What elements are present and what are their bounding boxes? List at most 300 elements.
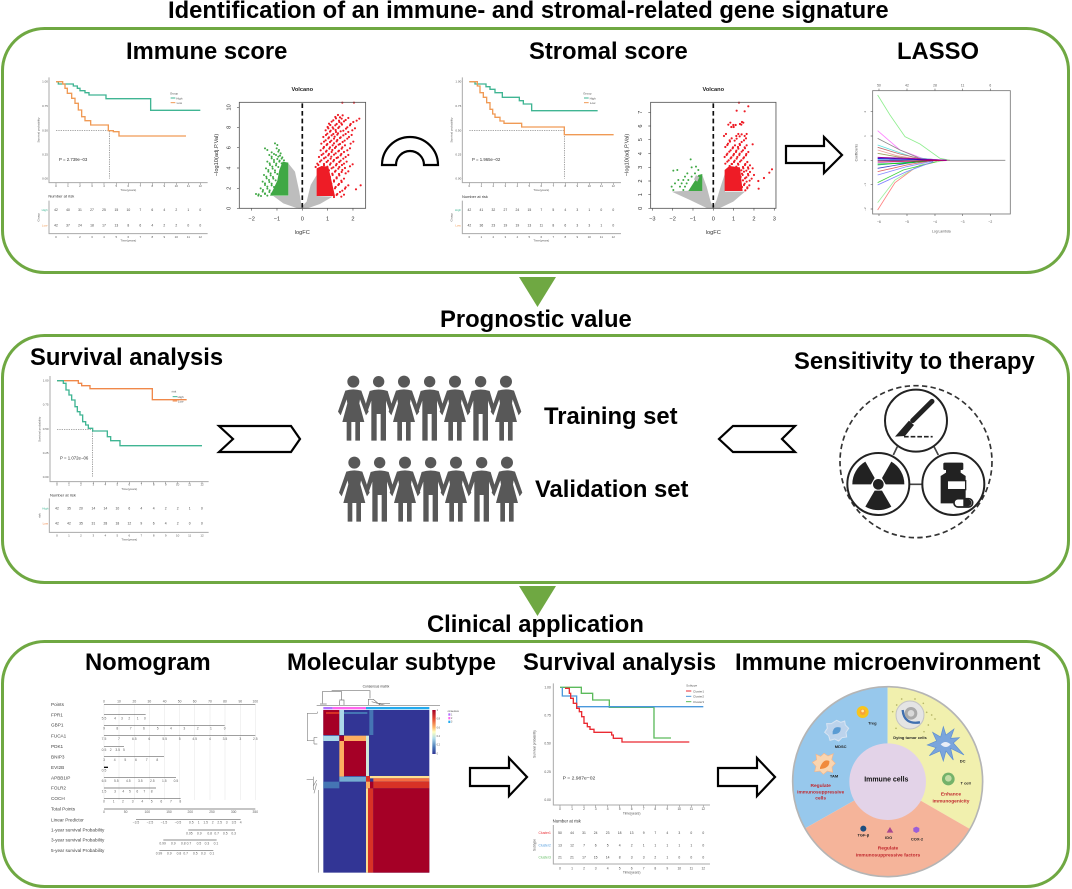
chart: survival curve training set: 31 (91, 522, 95, 526)
heading: survival analysis: Survival analysis (30, 344, 223, 371)
heading: survival analysis: Survival analysis (523, 649, 716, 676)
chart: nomogram: 0.3 (205, 841, 209, 845)
chart: nomogram: 3 (132, 800, 134, 804)
chart: nomogram: COCH (51, 796, 65, 801)
chart: immune score survival curve: Group (170, 91, 178, 95)
chart: subtype survival curve: 0.25 (544, 770, 551, 774)
label: training set: Training set (544, 403, 678, 430)
chart: subtype survival curve: 2 (631, 843, 633, 847)
chart: subtype survival curve: Cluster1 (693, 689, 704, 693)
chart: subtype survival curve: 0 (678, 856, 680, 860)
chart: immune score survival curve: 5 (115, 184, 117, 188)
chart: subtype survival curve: 4 (607, 866, 609, 870)
chart: immune score survival curve: 4 (103, 235, 105, 239)
chart: survival curve training set: Time(years) (121, 537, 137, 541)
chart: nomogram: 3.5 (223, 737, 227, 741)
chart: nomogram: 3.5 (115, 748, 120, 752)
chart: subtype survival curve: 9 (643, 831, 645, 835)
chart: immune score volcano plot: 0 (227, 207, 233, 210)
chart: stromal score survival curve: 8 (564, 235, 566, 239)
chart: subtype survival curve: 23 (606, 831, 610, 835)
chart: stromal score survival curve: 4 (564, 208, 566, 212)
chart: nomogram: 2.5 (217, 821, 222, 825)
chart: subtype survival curve: 4 (607, 807, 609, 811)
chart: survival curve training set: 35 (79, 522, 83, 526)
chart: stromal score survival curve: 6 (540, 235, 542, 239)
chart: immune score survival curve: 7 (139, 208, 141, 212)
chart: survival curve training set: 3 (92, 483, 94, 487)
label: regulate immunosuppressive cells: Regulate (810, 783, 831, 789)
chart: stromal score survival curve: 41 (479, 208, 483, 212)
chart: subtype survival curve: 6 (631, 866, 633, 870)
chart: nomogram: 4.5 (126, 779, 131, 783)
chart: survival curve training set: 9 (165, 483, 167, 487)
chart: immune score survival curve: Survival probability (36, 117, 40, 143)
icon: T cell (942, 773, 971, 786)
chart: survival curve training set: 3 (92, 533, 94, 537)
chart: nomogram: 4 (114, 758, 116, 762)
chart: nomogram: 0.1 (214, 841, 218, 845)
chart: stromal score survival curve: Number at risk (462, 194, 488, 199)
chart: immune score volcano plot: −1 (274, 216, 280, 222)
chart: nomogram: 2.5 (253, 737, 258, 741)
chart: nomogram: 0.5 (193, 852, 198, 856)
chart: subtype survival curve: 6 (595, 843, 597, 847)
chart: subtype survival curve (533, 683, 710, 875)
chart: nomogram: 0.5 (102, 768, 106, 772)
chart: subtype survival curve: 31 (582, 831, 586, 835)
chart: nomogram: 200 (188, 810, 193, 814)
chart: subtype survival curve: 1 (666, 856, 668, 860)
chart: nomogram: 5 (179, 737, 181, 741)
chart: immune score volcano plot: 2 (351, 216, 355, 222)
chart: nomogram: 7.5 (102, 737, 106, 741)
chart: subtype survival curve: 9 (666, 866, 668, 870)
chart: nomogram: 70 (208, 699, 212, 703)
chart: stromal score survival curve: 7 (552, 184, 554, 188)
chart: immune score survival curve: 1 (67, 235, 69, 239)
chart: nomogram: 1-year survival Probability (51, 827, 105, 832)
chart: LASSO coefficient paths: 50 (877, 83, 881, 87)
chart: LASSO coefficient paths: 1 (863, 135, 867, 137)
chart: immune score survival curve: 11 (187, 184, 190, 188)
chart: subtype survival curve: 2 (583, 866, 585, 870)
chart: survival curve training set: 10 (176, 483, 180, 487)
chart: nomogram: 6 (143, 727, 145, 731)
chart: nomogram: 4.5 (192, 737, 197, 741)
chart: subtype survival curve: 0 (690, 856, 692, 860)
chart: stromal score volcano plot (625, 87, 776, 236)
arrow: to survival analysis (470, 758, 527, 796)
chart: stromal score survival curve: Survival probability (450, 117, 454, 143)
chart: subtype survival curve: 5 (607, 843, 609, 847)
chart: nomogram: 1.5 (203, 821, 208, 825)
chart: nomogram: 0.9 (197, 831, 202, 835)
chart: nomogram: 1 (113, 800, 115, 804)
chart: stromal score survival curve: 0 (468, 184, 470, 188)
chart: subtype survival curve: Subtype (686, 683, 697, 687)
chart: immune score survival curve: 0.75 (42, 104, 48, 108)
chart: immune score survival curve: 18 (90, 223, 94, 227)
chart: immune score survival curve: 2 (163, 223, 165, 227)
chart: nomogram: 1 (137, 716, 139, 720)
chart: stromal score survival curve: 27 (503, 208, 507, 212)
chart: survival curve training set: 7 (140, 533, 142, 537)
chart: immune score survival curve: 0.50 (42, 128, 48, 132)
chart: LASSO coefficient paths: −4 (933, 220, 937, 224)
chart: stromal score survival curve: 12 (612, 184, 615, 188)
chart: immune score volcano plot: 2 (227, 187, 233, 190)
chart: nomogram: 2 (212, 821, 214, 825)
chart: nomogram: 7 (170, 800, 172, 804)
chart: stromal score survival curve: 8 (552, 223, 554, 227)
chart: stromal score survival curve: 36 (479, 223, 483, 227)
chart: stromal score survival curve: 9 (576, 184, 578, 188)
chart: stromal score volcano plot: −log10(adj.P.Val) (625, 134, 631, 176)
chart: subtype survival curve: 50 (558, 831, 562, 835)
chart: survival curve training set: 9 (140, 522, 142, 526)
label: enhance immunogenicity: immunogenicity (932, 798, 970, 804)
chart: nomogram: 0.5 (174, 779, 178, 783)
chart: stromal score survival curve: 1 (588, 208, 590, 212)
chart: survival curve training set: 6 (128, 483, 130, 487)
chart: stromal score survival curve: 11 (540, 223, 543, 227)
chart: immune score survival curve: 3 (91, 184, 93, 188)
chart: nomogram: 1 (198, 821, 200, 825)
chart: stromal score survival curve: 0 (612, 223, 614, 227)
chart: stromal score volcano plot: 7 (638, 111, 644, 114)
chart: survival curve training set: 14 (103, 506, 107, 510)
label: regulate immunosuppressive factors: immunosuppressive factors (856, 852, 920, 858)
chart: stromal score volcano plot: 3 (773, 216, 776, 222)
chart: subtype survival curve: 1 (571, 866, 573, 870)
icon: TAM: TAM (830, 774, 839, 779)
heading: molecular subtype: Molecular subtype (287, 649, 496, 676)
chart: nomogram: 3 (239, 737, 241, 741)
chart: survival curve training set: 2 (177, 506, 179, 510)
chart: nomogram: 0.7 (187, 841, 191, 845)
chart: consensus matrix heatmap: Consensus matrix (363, 684, 390, 688)
chart: nomogram: 1.5 (102, 789, 106, 793)
chart: survival curve training set: 4 (140, 506, 142, 510)
chart: nomogram: 0.7 (183, 852, 188, 856)
chart: subtype survival curve: Survival probability (533, 730, 537, 758)
chart: LASSO coefficient paths: Log Lambda (932, 230, 951, 234)
chart: immune score survival curve: 13 (114, 223, 118, 227)
chart: immune score survival curve: Number at risk (48, 194, 74, 199)
chart: immune score survival curve: 15 (114, 208, 118, 212)
chart: consensus matrix heatmap: consensus (448, 711, 460, 713)
chart: nomogram: 5 (124, 758, 126, 762)
chart: nomogram: 0.99 (156, 852, 162, 856)
chart: LASSO coefficient paths (854, 83, 1010, 234)
chart: subtype survival curve: 0 (702, 831, 704, 835)
chart: nomogram: 4 (114, 716, 116, 720)
chart: immune score survival curve: 0 (199, 208, 201, 212)
chart: stromal score survival curve: Time(years) (533, 188, 549, 192)
chart: stromal score volcano plot: 0 (712, 216, 715, 222)
chart: nomogram: 0.7 (214, 831, 219, 835)
chart: stromal score survival curve: High (590, 96, 596, 100)
chart: nomogram: 90 (238, 699, 242, 703)
chart: subtype survival curve: Subtype (533, 839, 537, 851)
chart: immune score survival curve: 2 (79, 235, 81, 239)
chart: survival curve training set: 1 (68, 483, 70, 487)
chart: stromal score volcano plot: 2 (752, 216, 756, 222)
chart: subtype survival curve: 0.50 (544, 742, 551, 746)
chart: subtype survival curve: 2 (654, 856, 656, 860)
chart: survival curve training set: Low (43, 522, 49, 526)
chart: subtype survival curve: 7 (643, 807, 645, 811)
chart: stromal score survival curve: 19 (503, 223, 507, 227)
chart: nomogram: 350 (253, 810, 258, 814)
chart: stromal score volcano plot: 3 (638, 166, 644, 169)
icon: T cell: T cell (961, 781, 971, 786)
chart: immune score survival curve: 40 (66, 208, 70, 212)
chart: LASSO coefficient paths: −6 (877, 220, 881, 224)
icon: IDO (885, 827, 893, 840)
chart: stromal score volcano plot: −2 (669, 216, 676, 222)
chart: stromal score survival curve: 0.25 (455, 152, 462, 156)
chart: nomogram: 6 (135, 758, 137, 762)
icon: dying tumor cell (893, 699, 935, 740)
chart: stromal score survival curve: 5 (528, 235, 530, 239)
label: enhance immunogenicity: Enhance (941, 792, 961, 798)
chart: stromal score survival curve: 42 (467, 223, 471, 227)
chart: nomogram: 9 (103, 727, 105, 731)
chart: nomogram: 7 (130, 727, 132, 731)
panel: prognostic value (2, 336, 1068, 582)
chart: subtype survival curve: 44 (570, 831, 574, 835)
chart: nomogram: 4 (209, 737, 211, 741)
chart: nomogram: 5.5 (114, 779, 119, 783)
icon: radiation (852, 462, 904, 510)
heading: nomogram: Nomogram (85, 649, 211, 676)
chart: immune score survival curve: 42 (54, 223, 58, 227)
chart: subtype survival curve: 8 (654, 807, 656, 811)
chart: nomogram: 80 (223, 699, 227, 703)
chart: immune score survival curve: High (42, 208, 48, 212)
chart: nomogram: 6 (148, 737, 150, 741)
chart: subtype survival curve: 0.75 (544, 714, 551, 718)
chart: stromal score survival curve: 3 (576, 223, 578, 227)
chart: survival curve training set: 12 (200, 483, 204, 487)
chart: survival curve training set: 0 (189, 522, 191, 526)
chart: survival curve training set: 0.25 (43, 451, 49, 455)
chart: nomogram: 0.95 (186, 831, 193, 835)
chart: immune score survival curve: 10 (126, 208, 130, 212)
chart: immune score survival curve (36, 77, 208, 243)
chart: stromal score volcano plot: 0 (638, 207, 644, 210)
chart: subtype survival curve: Cluster1 (538, 831, 551, 835)
chart: subtype survival curve: 3 (595, 807, 597, 811)
chart: stromal score volcano plot: 2 (638, 179, 644, 183)
chart: nomogram: 0.5 (223, 831, 228, 835)
chart: LASSO coefficient paths: −2 (863, 207, 867, 211)
chart: nomogram: Total Points (51, 807, 76, 812)
chart: survival curve training set: 8 (153, 483, 155, 487)
chart: immune score survival curve: 7 (139, 184, 141, 188)
chart: nomogram: 8 (116, 727, 118, 731)
chart: immune score survival curve: 6 (127, 235, 129, 239)
chart: immune score volcano plot: Volcano (292, 87, 314, 93)
chart: nomogram: 0.3 (231, 831, 236, 835)
chart: survival curve training set: 4 (153, 506, 155, 510)
chart: survival curve training set: 4 (104, 483, 106, 487)
chart: immune score survival curve: 6 (139, 223, 141, 227)
chart: subtype survival curve: 11 (690, 807, 693, 811)
chart: subtype survival curve: 21 (558, 856, 562, 860)
chart: nomogram: 5.5 (162, 737, 167, 741)
chart: survival curve training set (37, 376, 209, 541)
chart: subtype survival curve: Cluster2 (538, 843, 551, 847)
diagram: immune microenvironment wheel (793, 687, 983, 877)
chart: subtype survival curve: 6 (631, 807, 633, 811)
chart: stromal score volcano plot: 1 (732, 216, 735, 222)
chart: survival curve training set: 0.00 (43, 475, 49, 479)
chart: nomogram: 1 (210, 727, 212, 731)
label: regulate immunosuppressive factors: Regulate (878, 846, 898, 852)
chart: immune score volcano plot: 0 (301, 216, 304, 222)
icon: Treg (857, 706, 877, 725)
chart: immune score survival curve: 9 (163, 235, 165, 239)
chart: survival curve training set: 12 (127, 522, 131, 526)
chart: subtype survival curve: 12 (701, 807, 705, 811)
chart: survival curve training set: Low (178, 399, 184, 403)
chart: nomogram: FUCA1 (51, 733, 67, 738)
icon: dendritic cell (927, 727, 966, 764)
chart: survival curve training set: 10 (115, 506, 119, 510)
chart: stromal score volcano plot: −1 (690, 216, 696, 222)
chart: immune score survival curve: 10 (175, 184, 178, 188)
chart: stromal score survival curve: 19 (515, 223, 519, 227)
chart: subtype survival curve: 5 (619, 866, 621, 870)
chart: subtype survival curve: 13 (558, 843, 562, 847)
chart: nomogram: 300 (231, 810, 237, 814)
chart: immune score volcano plot: 1 (326, 216, 329, 222)
chart: nomogram: −3.5 (133, 821, 139, 825)
heading: sensitivity to therapy: Sensitivity to therapy (794, 348, 1035, 375)
chart: nomogram: 10 (117, 699, 121, 703)
heading: clinical application: Clinical application (427, 611, 644, 638)
chart: stromal score survival curve: 12 (612, 235, 615, 239)
chart: subtype survival curve: 1.00 (544, 685, 551, 689)
chart: immune score survival curve: 12 (199, 235, 202, 239)
chart: immune score volcano plot: 6 (227, 146, 233, 149)
chart: nomogram: 50 (124, 810, 128, 814)
chart: LASSO coefficient paths: 0 (863, 159, 867, 161)
chart: nomogram: 250 (209, 810, 215, 814)
chart: nomogram: 5 (129, 789, 131, 793)
chart: nomogram: FPR1 (51, 712, 63, 717)
chart: stromal score survival curve: 1 (600, 223, 602, 227)
chart: nomogram: 30 (147, 699, 151, 703)
chart: nomogram: 6.5 (132, 737, 137, 741)
icon: Treg: Treg (868, 720, 877, 725)
icon: dendritic cell: DC (960, 759, 966, 764)
chart: consensus matrix heatmap: 0.8 (437, 719, 441, 721)
chart: nomogram: 0.8 (177, 852, 181, 856)
chart: survival curve training set: 2 (177, 522, 179, 526)
chart: nomogram: 100 (253, 699, 258, 703)
chart: survival curve training set: 5 (116, 533, 118, 537)
chart: nomogram: 0.1 (210, 852, 214, 856)
chart: consensus matrix heatmap: 1 (451, 714, 453, 716)
chart: nomogram: 100 (145, 810, 150, 814)
chart: nomogram: 2 (128, 716, 130, 720)
icon: COX-2 (911, 827, 924, 842)
chart: immune score survival curve: 6 (127, 184, 129, 188)
chart: stromal score survival curve: 11 (600, 184, 603, 188)
chart: nomogram: 5 (157, 727, 159, 731)
chart: subtype survival curve: 7 (643, 866, 645, 870)
chart: stromal score survival curve: 7 (552, 235, 554, 239)
chart: nomogram: 4 (240, 821, 242, 825)
chart: stromal score survival curve: 2 (492, 184, 494, 188)
chart: LASSO coefficient paths: 42 (905, 83, 909, 87)
chart: subtype survival curve: 1 (654, 843, 656, 847)
icon: therapy types (840, 386, 992, 538)
chart: stromal score survival curve: 10 (588, 235, 591, 239)
chart: subtype survival curve: 3 (631, 856, 633, 860)
icon: TGF-beta (857, 826, 870, 837)
chart: immune score survival curve: 2 (175, 223, 177, 227)
heading: prognostic value: Prognostic value (440, 306, 632, 333)
chart: immune score survival curve: 6 (151, 208, 153, 212)
chart: nomogram: 2 (197, 727, 199, 731)
chart: nomogram: 0.8 (181, 841, 186, 845)
panel: clinical application (2, 642, 1068, 886)
chart: nomogram: 8 (151, 789, 153, 793)
chart: subtype survival curve: 10 (677, 807, 681, 811)
chart: subtype survival curve: 12 (570, 843, 574, 847)
chart: survival curve training set: 20 (79, 506, 83, 510)
chart: stromal score survival curve: 6 (540, 184, 542, 188)
chart: subtype survival curve: Cluster3 (693, 700, 704, 704)
panel: gene signature identification (2, 28, 1068, 272)
arrow: chevron right (219, 426, 300, 452)
chart: consensus matrix heatmap: 2 (451, 718, 453, 720)
chart: stromal score survival curve: 3 (576, 208, 578, 212)
arrow: green triangle down (519, 586, 556, 616)
chart: survival curve training set: 2 (165, 506, 167, 510)
chart: subtype survival curve: 8 (654, 866, 656, 870)
chart: stromal score survival curve: 4 (516, 235, 518, 239)
chart: immune score volcano plot: 10 (227, 104, 233, 110)
chart: immune score survival curve: 5 (115, 235, 117, 239)
chart: survival curve training set: 0 (201, 522, 203, 526)
chart: survival curve training set: 0 (56, 533, 58, 537)
chart: survival curve training set: 6 (128, 533, 130, 537)
chart: subtype survival curve: 7 (583, 843, 585, 847)
chart: nomogram: 5 (123, 748, 125, 752)
chart: immune score survival curve: 2 (175, 208, 177, 212)
chart: stromal score survival curve (450, 77, 621, 243)
chart: consensus matrix heatmap: 1 (437, 710, 439, 712)
chart: immune score survival curve: 27 (90, 208, 94, 212)
chart: stromal score volcano plot: logFC (706, 230, 721, 236)
chart: survival curve training set: High (178, 395, 184, 399)
chart: immune score survival curve: 24 (78, 223, 82, 227)
chart: survival curve training set: 7 (140, 483, 142, 487)
chart: immune score volcano plot (214, 87, 366, 236)
chart: subtype survival curve: 2 (583, 807, 585, 811)
label: validation set: Validation set (535, 476, 688, 503)
chart: subtype survival curve: 0 (559, 807, 561, 811)
chart: immune score survival curve: 25 (102, 208, 106, 212)
chart: nomogram: 1.5 (162, 779, 167, 783)
chart: stromal score survival curve: Low (455, 223, 462, 227)
